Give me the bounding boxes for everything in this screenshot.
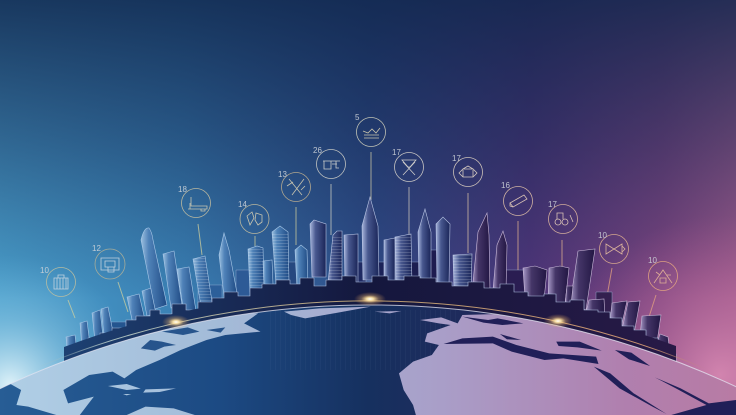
marker 10 roof xyxy=(648,256,678,290)
north american bays xyxy=(141,327,225,351)
marker 5 boat xyxy=(355,113,386,146)
window stripes xyxy=(193,232,627,324)
city skyline xyxy=(66,197,676,366)
ocean xyxy=(0,305,736,415)
marker 10 valve: 10 xyxy=(598,231,607,240)
right towers xyxy=(472,213,670,354)
marker 16 saw: 16 xyxy=(501,181,510,190)
marker 17 stand: 17 xyxy=(392,148,401,157)
marker 17 tractor xyxy=(548,200,578,234)
continents xyxy=(9,307,736,415)
marker 17 stand xyxy=(392,148,424,182)
land: greenland xyxy=(284,307,371,318)
land: iceland xyxy=(375,311,401,313)
globe xyxy=(0,305,736,415)
seas xyxy=(444,317,736,415)
marker 17 tractor: 17 xyxy=(548,200,557,209)
light flares xyxy=(162,292,572,329)
marker 10 luggage xyxy=(40,266,76,296)
ocean streaks xyxy=(270,310,460,370)
marker 18 truck: 18 xyxy=(178,185,187,194)
centre towers xyxy=(310,197,472,292)
marker 26 machine xyxy=(313,146,346,178)
marker 10 luggage: 10 xyxy=(40,266,49,275)
land: africa and eurasia xyxy=(399,313,736,415)
marker 17 tent: 17 xyxy=(452,154,461,163)
marker 12 folders xyxy=(92,244,125,279)
land: south america xyxy=(127,407,195,415)
low-rise base silhouette xyxy=(66,276,676,366)
land: cuba xyxy=(108,384,176,395)
icon markers xyxy=(40,113,678,296)
horizon band xyxy=(0,291,736,389)
marker 5 boat: 5 xyxy=(355,113,360,122)
connector lines xyxy=(68,152,656,320)
marker 10 valve xyxy=(598,231,628,264)
marker 26 machine: 26 xyxy=(313,146,322,155)
marker 12 folders: 12 xyxy=(92,244,101,253)
marker 13 crossed tools xyxy=(278,170,310,202)
marker 10 roof: 10 xyxy=(648,256,657,265)
marker 17 tent xyxy=(452,154,482,186)
left towers xyxy=(66,226,308,357)
marker 18 truck xyxy=(178,185,210,218)
filler buildings behind towers xyxy=(108,250,612,340)
land: north america xyxy=(9,310,261,415)
marker 14 gears: 14 xyxy=(238,200,247,209)
marker 16 saw xyxy=(501,181,532,216)
globe rim xyxy=(0,305,736,394)
marker 14 gears xyxy=(238,200,269,234)
marker 13 crossed tools: 13 xyxy=(278,170,287,179)
